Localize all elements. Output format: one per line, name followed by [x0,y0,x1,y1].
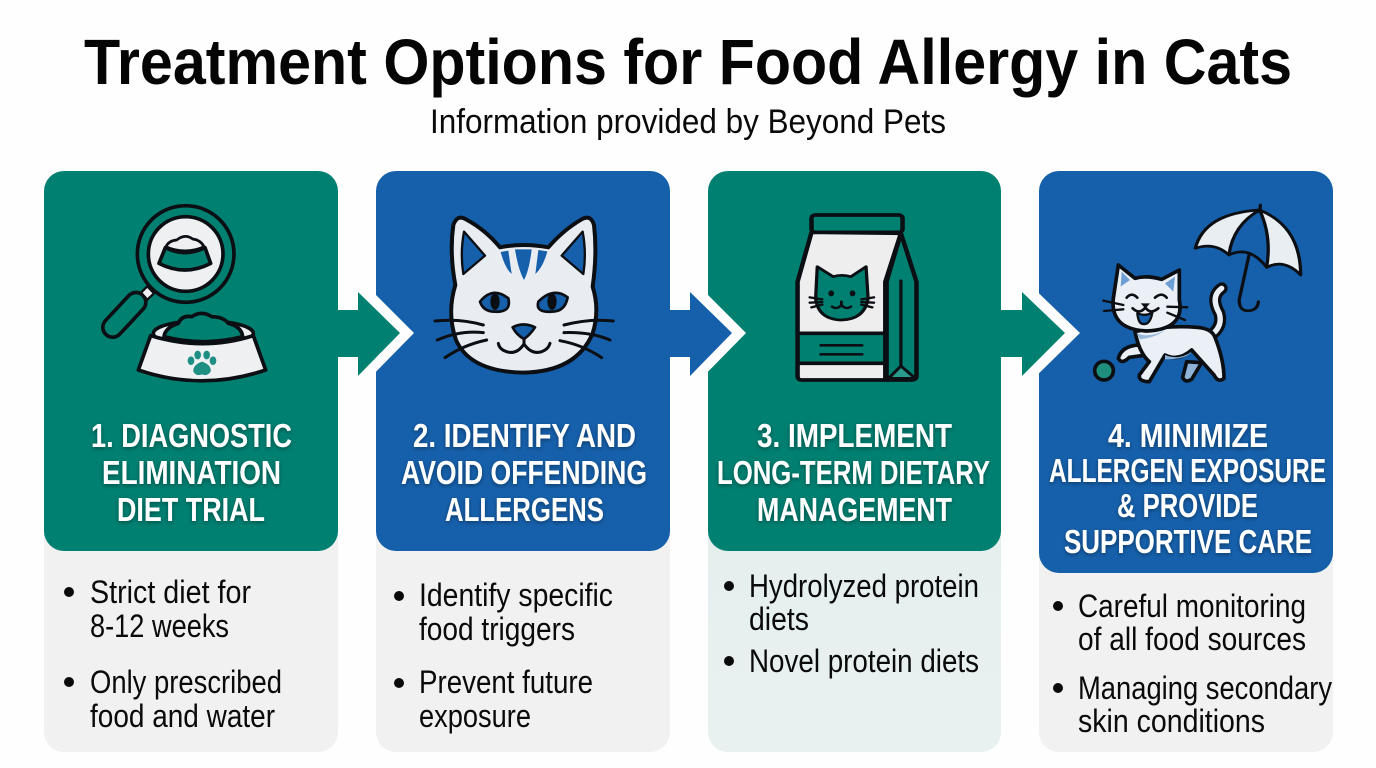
heading card 4: & PROVIDE [1117,487,1258,524]
bullets card 2: exposure [419,698,531,734]
bullets card 2: Identify specific [419,577,613,613]
heading card 2 [401,417,647,528]
bullets card 3: Hydrolyzed protein [749,568,979,604]
subtitle: Information provided by Beyond Pets [430,103,946,141]
icon: umbrella [1195,205,1301,311]
bullets card 4: skin conditions [1078,703,1265,739]
panel: step 2 [376,171,670,752]
panel: step 1 [44,171,338,752]
arrow: step 1 to 2 [338,277,414,390]
title: Treatment Options for Food Allergy in Cats [84,26,1292,98]
header card 2 [376,171,670,551]
header card 1 [44,171,338,551]
heading card 2: 2. IDENTIFY AND [413,417,636,454]
heading card 1 [91,417,292,528]
body card 1 [44,500,338,752]
bullets card 2 [394,577,613,734]
panel: step 4 [1039,171,1333,752]
icon: playful cat with ball [1095,265,1224,382]
body card 4 [1039,520,1333,752]
body card 2 [376,500,670,752]
bullets card 1: food and water [90,698,275,734]
heading card 2: AVOID OFFENDING [401,454,647,491]
bullets card 4: of all food sources [1078,621,1306,657]
icon: cat face [435,218,613,373]
bullets card 4 [1053,588,1332,739]
panel: step 3 [708,171,1001,752]
heading card 1: DIET TRIAL [117,491,265,528]
icon: cat food bag [798,215,916,380]
header card 4 [1039,171,1333,573]
bullets card 4: Careful monitoring [1078,588,1306,624]
bullets card 3 [724,568,979,679]
header card 3 [708,171,1001,551]
heading card 1: ELIMINATION [102,454,281,491]
bullets card 2: food triggers [419,611,575,647]
bullets card 1 [64,574,282,734]
heading card 3: MANAGEMENT [757,491,952,528]
bullets card 2: Prevent future [419,664,593,700]
heading card 4 [1049,417,1326,560]
heading card 4: 4. MINIMIZE [1108,417,1268,454]
body card 3 [708,500,1001,752]
bullets card 1: Strict diet for [90,574,251,610]
bullets card 1: 8-12 weeks [90,608,229,644]
arrow: step 2 to 3 [670,277,746,390]
heading card 4: SUPPORTIVE CARE [1064,523,1312,560]
heading card 3: 3. IMPLEMENT [757,417,952,454]
bullets card 3: Novel protein diets [749,643,979,679]
bullets card 4: Managing secondary [1078,670,1332,706]
heading card 1: 1. DIAGNOSTIC [91,417,292,454]
icon: magnifier over food bowl [113,206,266,381]
heading card 3 [717,417,990,528]
heading card 3: LONG-TERM DIETARY [717,454,990,491]
bullets card 1: Only prescribed [90,664,282,700]
heading card 2: ALLERGENS [445,491,604,528]
arrow: step 3 to 4 [1001,277,1080,390]
bullets card 3: diets [749,601,809,637]
